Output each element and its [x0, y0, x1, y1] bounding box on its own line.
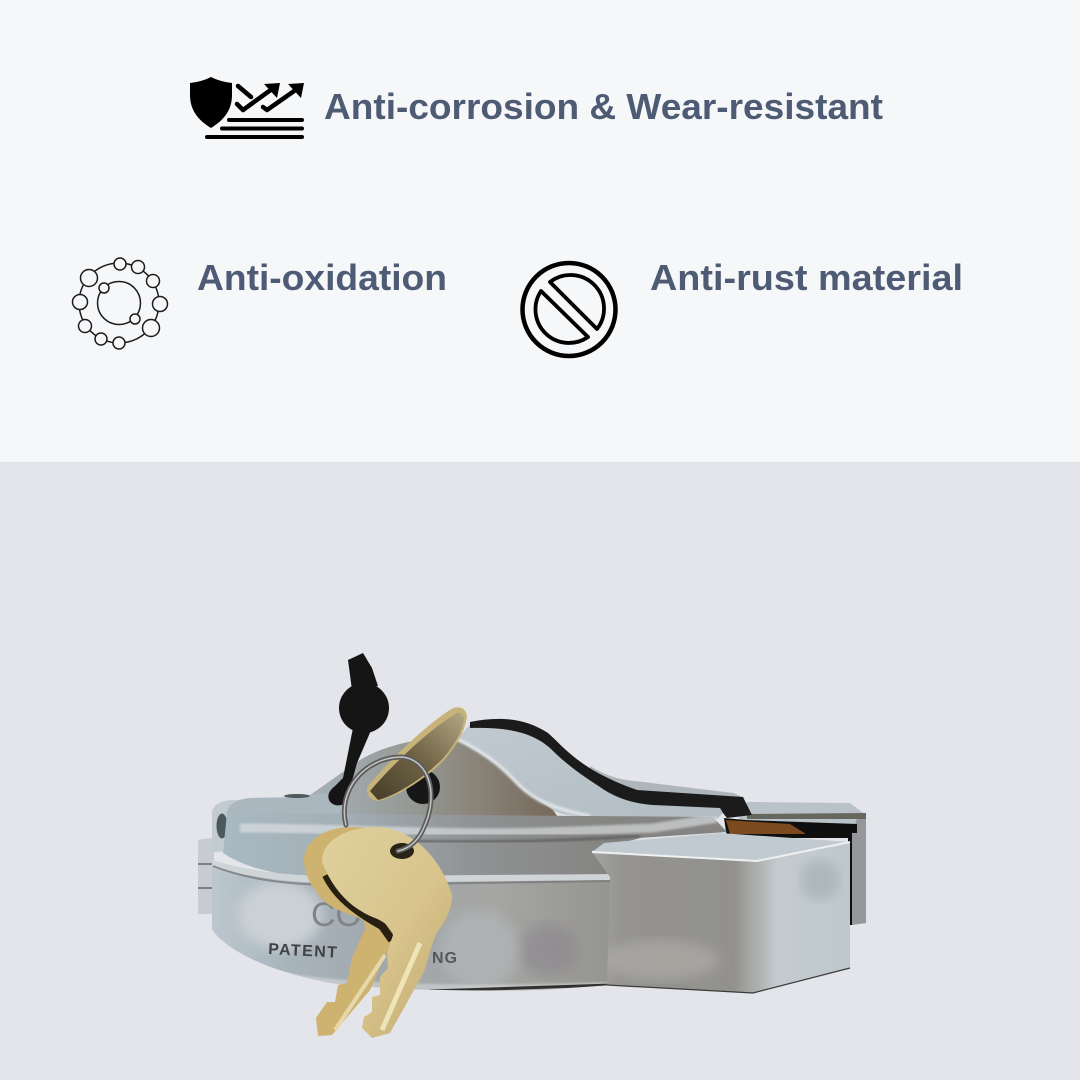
- icon: prohibition sign: [522, 263, 616, 356]
- bottom background panel: [0, 462, 1080, 1080]
- lid top surface: [226, 790, 345, 818]
- icon: shield with rising arrows: [190, 77, 304, 137]
- lid slot: [284, 794, 310, 798]
- silver strip above gasket: [590, 766, 745, 798]
- stamped text: NG: NG: [432, 950, 458, 967]
- rear key: [304, 827, 395, 1036]
- heading: Anti-rust material: Anti-rust material: [650, 257, 963, 298]
- rubber dust cap: [328, 653, 389, 805]
- heading: Anti-corrosion and Wear-resistant: Anti-corrosion & Wear-resistant: [324, 86, 883, 127]
- key ring: [344, 757, 431, 851]
- front key: [322, 827, 452, 1038]
- right block: [592, 833, 850, 993]
- left hinge plate: [198, 800, 245, 914]
- black cylinder plug: [406, 770, 440, 804]
- lower body: [212, 860, 612, 990]
- dome front face: [250, 739, 560, 820]
- key head inserted in lock: [367, 707, 467, 801]
- dome highlight ridge: [457, 739, 590, 816]
- upper lid wall: [223, 813, 727, 878]
- top background panel: [0, 0, 1080, 462]
- stamped text: PATENT: PATENT: [268, 941, 339, 962]
- body shading and rim: [212, 860, 612, 991]
- lid wall highlight stripes: [240, 818, 717, 842]
- dark gasket band: [470, 719, 752, 818]
- heading: Anti-oxidation: Anti-oxidation: [197, 257, 447, 298]
- back hook arm: [724, 802, 866, 925]
- icon: oxidation molecule ring: [72, 258, 168, 349]
- dome surface blue: [457, 723, 723, 819]
- product photo: locking cap with keys: [198, 653, 866, 1038]
- stamped text: large logo: CO: [311, 896, 362, 934]
